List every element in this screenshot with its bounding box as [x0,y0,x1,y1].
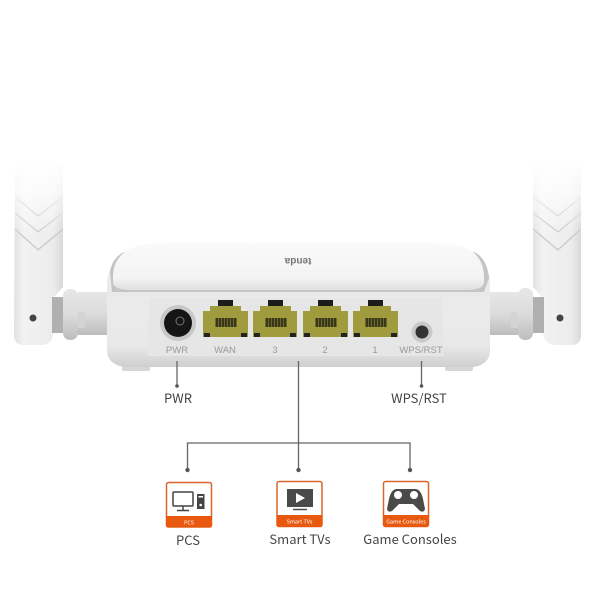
WPS/RST button [412,322,432,342]
brand logo: tenda [284,255,311,266]
left antenna joint [52,289,109,340]
port labels: WPS/RST [399,345,443,356]
icon: Game Consoles [383,482,429,527]
port 3 [253,300,297,337]
port 1 [353,300,398,337]
router body [107,243,490,371]
port labels: 2 [322,345,328,356]
port labels [166,345,443,356]
connector lines [175,361,423,472]
label: Smart TVs: Smart TVs [269,529,331,548]
label: WPS/RST: WPS/RST [391,388,447,407]
port labels: PWR [166,345,188,356]
port labels: 3 [272,345,278,356]
label: PWR: PWR [164,388,192,407]
label: Game Consoles: Game Consoles [363,529,457,548]
right antenna joint [488,288,544,340]
router lid [113,243,484,290]
icon: PCs [166,482,212,528]
icon: Smart TVs [276,482,322,527]
port labels: 1 [372,345,378,356]
left antenna [12,160,66,345]
icon: Smart TVs: Smart TVs [287,518,313,526]
icon: Game Consoles: Game Consoles [386,518,426,526]
label: PCS: PCS [176,530,200,549]
icon: PCs: PCS [184,518,195,526]
port WAN [203,300,248,337]
port labels: WAN [214,345,236,356]
power jack [160,305,196,341]
port 2 [303,300,348,337]
right antenna [530,160,584,345]
